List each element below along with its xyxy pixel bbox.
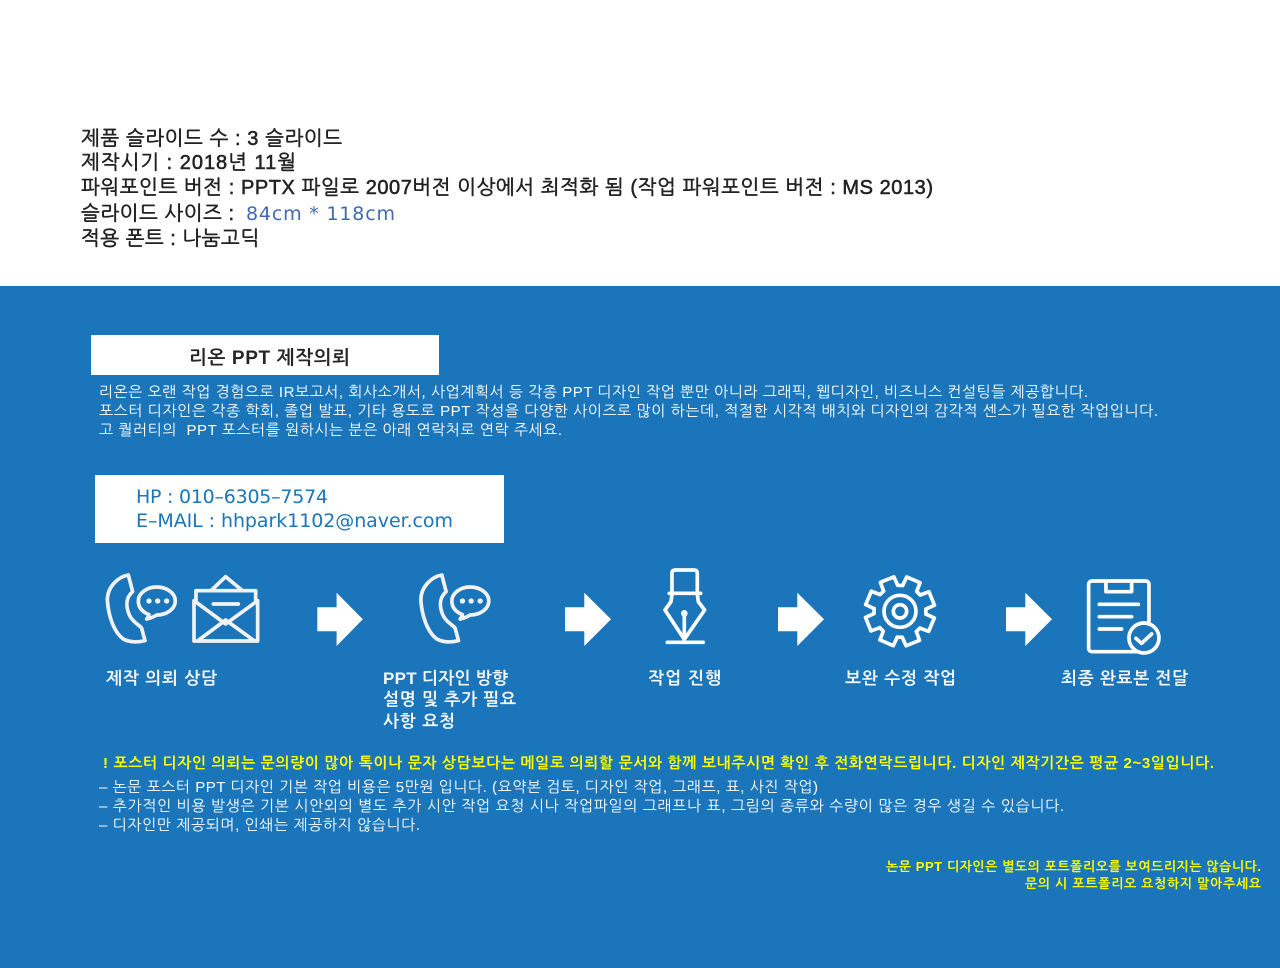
icon: phone and chat xyxy=(107,575,175,642)
text block: cost notes: – 디자인만 제공되며, 인쇄는 제공하지 않습니다. xyxy=(99,817,420,834)
email: E–MAIL : hhpark1102@naver.com xyxy=(136,510,453,532)
phone number: HP : 010–6305–7574 xyxy=(136,486,328,508)
arrow 1 xyxy=(317,593,363,646)
step label 4: 보완 수정 작업 xyxy=(845,669,956,688)
step label 2: PPT 디자인 방향 xyxy=(383,669,508,688)
yellow portfolio notice xyxy=(886,859,1261,891)
text block: introduction xyxy=(99,384,1158,439)
arrow 4 xyxy=(1006,593,1052,646)
text: powerpoint version: 파워포인트 버전 : PPTX 파일로 2007버전 이상에서 최적화 됨 (작업 파워포인트 버전 : MS 2013) xyxy=(81,177,933,199)
step label 5: 최종 완료본 전달 xyxy=(1061,669,1189,688)
text: applied font: 적용 폰트 : 나눔고딕 xyxy=(81,228,259,250)
text block: introduction: 포스터 디자인은 각종 학회, 졸업 발표, 기타 용도로 PPT 작성을 다양한 사이즈로 많이 하는데, 적절한 시각적 배치와 디자인의 감각적 센스가 필요한 작업입니다. xyxy=(99,403,1158,420)
icon: envelope xyxy=(194,577,258,641)
step label 1: 제작 의뢰 상담 xyxy=(106,669,218,688)
icon: phone and chat 2 xyxy=(421,575,489,642)
yellow notice: ! 포스터 디자인 의뢰는 문의량이 많아 톡이나 문자 상담보다는 메일로 의뢰할 문서와 함께 보내주시면 확인 후 전화연락드립니다. 디자인 제작기간은 평균 2~3일입니다. xyxy=(103,755,1214,772)
step label 2 xyxy=(383,669,516,731)
text: slide size value: 84cm * 118cm xyxy=(246,203,395,225)
step label 2: 사항 요청 xyxy=(383,712,455,731)
icon: fountain pen xyxy=(665,570,705,642)
arrow 3 xyxy=(778,593,824,646)
panel: product information xyxy=(0,0,1280,286)
text block: introduction: 고 퀄러티의 PPT 포스터를 원하시는 분은 아래 연락처로 연락 주세요. xyxy=(99,422,562,439)
heading: 리온 PPT 제작의뢰 xyxy=(189,348,350,369)
yellow portfolio notice: 문의 시 포트폴리오 요청하지 말아주세요 xyxy=(1025,876,1261,891)
text: slide size label: 슬라이드 사이즈 : xyxy=(81,203,234,225)
text block: cost notes: – 추가적인 비용 발생은 기본 시안외의 별도 추가 시안 작업 요청 시나 작업파일의 그래프나 표, 그림의 종류와 수량이 많은 경우 생길 수 있습니다. xyxy=(99,798,1064,815)
contact box xyxy=(95,475,504,543)
icon: gear xyxy=(864,575,936,648)
text block: cost notes xyxy=(99,779,1064,834)
text block: cost notes: – 논문 포스터 PPT 디자인 기본 작업 비용은 5만원 입니다. (요약본 검토, 디자인 작업, 그래프, 표, 사진 작업) xyxy=(99,779,818,796)
panel: blue contact section xyxy=(0,286,1280,968)
arrow 2 xyxy=(565,593,611,646)
text: production date: 제작시기 : 2018년 11월 xyxy=(81,152,296,174)
heading box xyxy=(91,335,439,375)
text block: introduction: 리온은 오랜 작업 경험으로 IR보고서, 회사소개서, 사업계획서 등 각종 PPT 디자인 작업 뿐만 아니라 그래픽, 웹디자인, 비즈니스 컨설팅들 제공합니다. xyxy=(99,384,1088,401)
yellow portfolio notice: 논문 PPT 디자인은 별도의 포트폴리오를 보여드리지는 않습니다. xyxy=(886,859,1261,874)
step label 2: 설명 및 추가 필요 xyxy=(383,690,516,709)
step label 3: 작업 진행 xyxy=(648,669,721,688)
text: slide count: 제품 슬라이드 수 : 3 슬라이드 xyxy=(81,128,342,150)
icon: checklist clipboard xyxy=(1089,581,1159,653)
